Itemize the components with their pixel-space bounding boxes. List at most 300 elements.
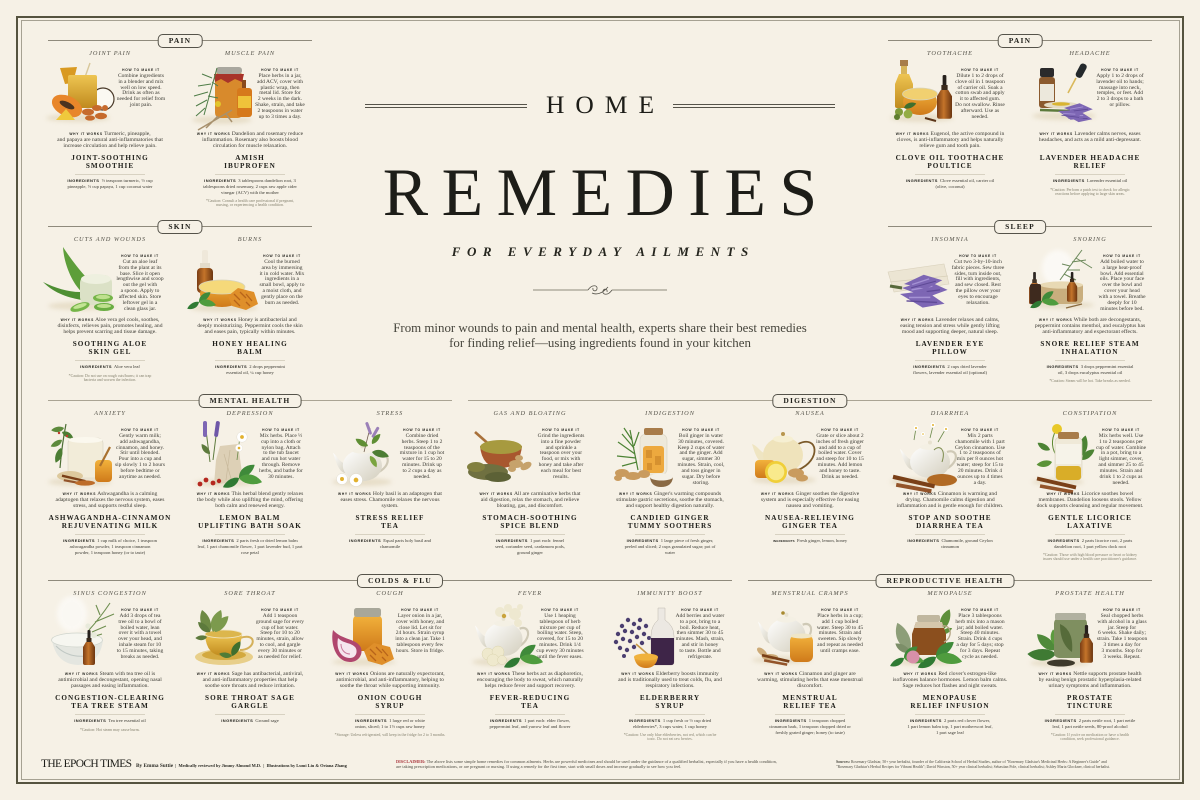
how to make it xyxy=(521,428,601,481)
how to make it: the pillow over your xyxy=(956,288,1000,294)
how to make it: 3 months. Stop for xyxy=(1102,648,1142,654)
how to make it: HOW TO MAKE IT xyxy=(681,608,719,612)
how to make it: 3 times a day for xyxy=(1104,642,1140,648)
ingredients: *Caution: Use only blue elderberries, not red, which can be xyxy=(624,733,716,737)
why it works: WHY IT WORKS While both are decongestants, xyxy=(1039,317,1141,323)
ingredients: peppermint leaf, and yarrow leaf and flower xyxy=(490,724,570,729)
how to make it xyxy=(100,428,180,481)
ingredients: *Caution: Steam will be hot. Take breaks as needed. xyxy=(1049,379,1131,383)
why it works: system. xyxy=(382,503,398,509)
ingredients: tablespoons dried rosemary, 2 cups raw apple cider xyxy=(203,184,297,189)
remedy title xyxy=(1020,340,1160,357)
ingredients xyxy=(215,364,285,375)
how to make it: HOW TO MAKE IT xyxy=(401,608,439,612)
icon: jar, vinegar and rosemary xyxy=(193,67,252,131)
how to make it: oils. Place your face xyxy=(1100,276,1144,282)
remedy title xyxy=(896,154,1004,170)
ingredients: leaf, 1 part nettle seeds, 80-proof alcohol xyxy=(1052,724,1128,729)
how to make it: then simmer 30 to 45 xyxy=(677,630,723,636)
icon: ginger tea with lemon xyxy=(740,420,830,490)
why it works xyxy=(740,672,880,690)
why it works: soothe sore throats and reduce irritation. xyxy=(205,683,295,689)
icon: nettle tincture jar xyxy=(1020,600,1110,670)
how to make it: eyes to encourage xyxy=(958,294,998,300)
how to make it: 20 minutes. Drink 4 xyxy=(958,468,1002,474)
remedy title xyxy=(600,514,740,531)
ingredients xyxy=(203,178,297,207)
icon: aloe vera and gel xyxy=(43,247,115,312)
how to make it xyxy=(116,254,164,312)
ingredients: *Storage: Unless refrigerated, will keep in the fridge for 2 to 3 months. xyxy=(335,733,445,737)
how to make it: HOW TO MAKE IT xyxy=(959,254,997,258)
how to make it: Boil ginger in water xyxy=(679,433,723,439)
how to make it: Strain. Drink 4 cups xyxy=(958,636,1002,642)
how to make it: small bowl, apply to xyxy=(260,282,304,288)
ingredients: INGREDIENTS Ground sage xyxy=(221,718,279,723)
how to make it: inches of fresh ginger xyxy=(816,439,864,445)
how to make it: cup of hot water. xyxy=(262,625,298,631)
intro paragraph: From minor wounds to pain and mental health, experts share their best remedies xyxy=(393,321,807,335)
how to make it: 2 weeks in the dark. xyxy=(258,96,302,102)
why it works xyxy=(460,672,600,690)
how to make it xyxy=(380,608,460,655)
ingredients: INGREDIENTS Tea tree essential oil xyxy=(74,718,146,723)
how to make it: lengthwise and scoop xyxy=(116,276,164,282)
ingredients xyxy=(740,718,880,736)
ingredients: INGREDIENTS 3 drops peppermint essential xyxy=(1047,364,1133,369)
how to make it: water. Steep 30 to 45 xyxy=(817,625,863,631)
card: headache xyxy=(1033,50,1144,196)
how to make it: gently place on the xyxy=(261,294,303,300)
how to make it xyxy=(940,428,1020,486)
how to make it: massage into neck, xyxy=(1099,85,1141,91)
ingredients: INGREDIENTS Clove essential oil, carrier oil xyxy=(906,178,994,183)
ingredients: rose petal xyxy=(241,550,259,555)
why it works: relieve gum and tooth pain. xyxy=(919,143,981,149)
remedy title xyxy=(880,514,1020,531)
how to make it: 30 minutes. xyxy=(268,474,294,480)
disclaimer xyxy=(396,760,777,769)
heading: digestion xyxy=(772,394,848,408)
ingredients: reactions before applying to large skin areas. xyxy=(1055,192,1125,196)
how to make it: minutes. Strain and xyxy=(1100,468,1142,474)
why it works: nausea and vomiting. xyxy=(786,503,834,509)
how to make it: cinnamon, and honey. xyxy=(116,445,164,451)
how to make it: and stir in honey xyxy=(682,642,718,648)
how to make it: storing. xyxy=(693,480,709,486)
ingredients: *Caution: Perform a patch test to check for allergic xyxy=(1050,188,1130,192)
how to make it xyxy=(240,608,320,661)
remedy title xyxy=(1020,154,1160,171)
why it works: inflammation. Rosemary also boosts blood xyxy=(202,137,298,143)
remedy title: TEA xyxy=(381,522,399,530)
ailment heading: PROSTATE HEALTH xyxy=(1055,590,1125,597)
why it works: dock supports cleansing and regular movement. xyxy=(1037,503,1143,509)
how to make it: and honey to taste. xyxy=(819,468,861,474)
ailment heading: GAS AND BLOATING xyxy=(493,410,567,417)
how to make it: Place 3 tablespoons xyxy=(958,613,1002,619)
how to make it xyxy=(955,68,1005,120)
how to make it: Cut an aloe leaf xyxy=(123,259,157,265)
ingredients: essential oil, ¼ cup honey xyxy=(226,370,274,375)
remedy title xyxy=(320,694,460,711)
heading: pain: PAIN xyxy=(169,36,191,45)
why it works: by easing benign prostatic hyperplasia-related xyxy=(1039,677,1141,683)
why it works: helps reduce fever and support recovery. xyxy=(485,683,575,689)
ingredients: INGREDIENTS 1 part each: elder flower, xyxy=(490,718,570,723)
card: cough xyxy=(320,586,460,751)
ailment heading: FEVER xyxy=(518,590,542,597)
remedy title: CLOVE OIL TOOTHACHE xyxy=(896,154,1004,162)
how to make it: Steep 40 minutes. xyxy=(960,630,1000,636)
how to make it: base. Slice it open xyxy=(120,271,160,277)
remedy title: INHALATION xyxy=(1061,348,1119,356)
ailment heading: CUTS AND WOUNDS xyxy=(74,236,146,243)
ingredients: elderberries*, 3 cups water, 1 cup honey xyxy=(633,724,707,729)
how to make it: ingredients in a xyxy=(265,276,299,282)
ingredients: INGREDIENTS 1 large piece of fresh ginger, xyxy=(627,538,713,543)
how to make it: Combine dried xyxy=(406,433,438,439)
how to make it: until the fever eases. xyxy=(537,654,583,660)
icon: elderberries and syrup bottle xyxy=(600,600,690,670)
why it works: and support healthy digestion naturally. xyxy=(626,503,714,509)
how to make it: HOW TO MAKE IT xyxy=(1103,608,1141,612)
how to make it: food, or mix with xyxy=(542,456,580,462)
remedy title: PROSTATE xyxy=(1067,694,1113,702)
how to make it: Layer onion in a jar, xyxy=(398,613,442,619)
ailment heading: TOOTHACHE xyxy=(927,50,973,57)
how to make it: minutes. Add lemon xyxy=(818,462,862,468)
why it works xyxy=(180,492,320,510)
how to make it: 1 to 2 teaspoons per xyxy=(1099,439,1143,445)
why it works: and anti-inflammatory properties that help xyxy=(203,677,297,683)
ingredients: peeled and sliced; 2 cups granulated sugar; pot of xyxy=(625,544,715,549)
why it works: increase circulation and help relieve pain. xyxy=(63,143,157,149)
how to make it: HOW TO MAKE IT xyxy=(1101,68,1139,72)
remedy title: STOMACH-SOOTHING xyxy=(482,514,578,522)
ingredients: INGREDIENTS 2 drops peppermint xyxy=(215,364,285,369)
how to make it: sugar, simmer 30 xyxy=(682,456,720,462)
why it works: circulation for muscle relaxation. xyxy=(213,143,287,149)
ingredients: water xyxy=(665,550,675,555)
how to make it: Apply 1 to 2 drops of xyxy=(1096,73,1144,79)
how to make it: a day. xyxy=(974,480,986,486)
how to make it: Mix herbs well. Use xyxy=(1099,433,1143,439)
heading: reproductive health: REPRODUCTIVE HEALTH xyxy=(887,576,1003,585)
how to make it: anytime as needed. xyxy=(119,474,161,480)
title block xyxy=(365,90,835,350)
how to make it: Cut two 3-by-10-inch xyxy=(954,259,1002,265)
why it works xyxy=(600,672,740,690)
how to make it: and add to a cup of xyxy=(819,445,861,451)
card: prostate health xyxy=(1020,586,1160,751)
how to make it: minutes. Mash, strain, xyxy=(676,636,724,642)
how to make it xyxy=(661,428,741,486)
how to make it: until cramps ease. xyxy=(820,648,860,654)
how to make it: cup of water. Combine xyxy=(1096,445,1146,451)
how to make it xyxy=(260,254,304,306)
how to make it: boil. Reduce heat, xyxy=(680,625,720,631)
how to make it: Cool the burned xyxy=(264,259,300,265)
how to make it: to cool, and gargle xyxy=(260,642,300,648)
why it works xyxy=(460,492,600,510)
ornament xyxy=(533,285,667,295)
heading: mental health: MENTAL HEALTH xyxy=(210,396,290,405)
panel: colds and flu xyxy=(40,574,740,754)
how to make it: nylon bag. Attach xyxy=(262,445,300,451)
how to make it: cup into a cloth or xyxy=(261,439,301,445)
how to make it: deeply for 10 xyxy=(1107,300,1137,306)
ingredients: leaf, 1 part chamomile flower, 1 part lavender bud, 1 part xyxy=(197,544,303,549)
remedy title: RELIEF TEA xyxy=(783,702,837,710)
how to make it: HOW TO MAKE IT xyxy=(121,428,159,432)
how to make it: mixture per cup of xyxy=(540,625,580,631)
remedy title: SYRUP xyxy=(655,702,685,710)
how to make it: it in cold water. Mix xyxy=(260,271,304,277)
how to make it: 2 teaspoons in water xyxy=(257,108,303,114)
how to make it xyxy=(938,254,1018,307)
why it works: WHY IT WORKS Onions are naturally expectorant, xyxy=(335,671,445,677)
why it works: inflammation and is gentle enough for children. xyxy=(897,503,1003,509)
why it works: WHY IT WORKS Steam with tea tree oil is xyxy=(65,671,155,677)
card: constipation xyxy=(1020,406,1160,571)
how to make it: up to 3 times a day. xyxy=(259,114,301,120)
why it works xyxy=(196,131,303,149)
how to make it: well on low speed. xyxy=(120,85,162,91)
how to make it: a spoon. Apply to xyxy=(121,288,159,294)
ailment heading: SORE THROAT xyxy=(224,590,276,597)
why it works: mood and supporting deeper, natural sleep. xyxy=(902,329,998,335)
remedy title xyxy=(740,514,880,531)
how to make it: Grate or slice about 2 xyxy=(816,433,864,439)
ingredients: chamomile xyxy=(380,544,400,549)
ingredients: ashwagandha powder, 1 teaspoon cinnamon xyxy=(70,544,150,549)
remedy title: SOOTHING ALOE xyxy=(73,340,147,348)
why it works: drying. Chamomile calms digestion and xyxy=(905,497,995,503)
icon: honey, oil and mint xyxy=(187,250,258,314)
ingredients: seed, coriander seed, cardamom pods, xyxy=(495,544,565,549)
heading: pain xyxy=(998,34,1042,48)
how to make it: and the ginger. Add xyxy=(679,450,723,456)
ingredients: INGREDIENTS ½ teaspoon turmeric, ½ cup xyxy=(67,178,153,183)
how to make it: needed. xyxy=(972,114,988,120)
how to make it: area by immersing xyxy=(262,265,302,271)
how to make it: minutes, strain, allow xyxy=(256,636,304,642)
ingredients xyxy=(40,538,180,556)
icon: teapot, honey and roots xyxy=(740,600,830,670)
ingredients: bacteria and worsen the infection. xyxy=(84,378,136,382)
how to make it: burn as needed. xyxy=(265,300,299,306)
how to make it: and steep for 10 to 15 xyxy=(816,456,864,462)
remedy title: SNORE RELIEF STEAM xyxy=(1040,340,1140,348)
remedy title: IBUPROFEN xyxy=(224,162,276,170)
card: fever xyxy=(460,586,600,751)
icon: licorice and dandelion jar xyxy=(1020,420,1110,490)
ingredients: pineapple, ½ cup papaya, 1 cup coconut water xyxy=(68,184,152,189)
remedy title: BALM xyxy=(237,348,263,356)
how to make it: herbs, and bathe for xyxy=(259,468,303,474)
how to make it: HOW TO MAKE IT xyxy=(541,608,579,612)
how to make it: for 3 days. Repeat xyxy=(960,648,1000,654)
panel: reproductive health xyxy=(740,574,1160,754)
how to make it: every 30 minutes or xyxy=(258,648,302,654)
ingredients xyxy=(1020,178,1160,196)
ailment heading: ANXIETY xyxy=(94,410,126,417)
remedy title: REJUVENATING MILK xyxy=(62,522,158,530)
ingredients xyxy=(67,178,153,189)
why it works: WHY IT WORKS All are carminative herbs that xyxy=(479,491,580,497)
how to make it: mix per 8 ounces hot xyxy=(957,456,1003,462)
remedy title xyxy=(180,694,320,711)
how to make it: Keep 2 cups of water xyxy=(678,445,724,451)
how to make it: Place herbs in a jar, xyxy=(258,73,302,79)
why it works: cloves, is anti-inflammatory and helps naturally xyxy=(897,137,1003,143)
how to make it: tree oil to a bowl of xyxy=(118,619,162,625)
how to make it: tablespoon of herb xyxy=(540,619,580,625)
remedy title: STOP AND SOOTHE xyxy=(908,514,992,522)
how to make it xyxy=(116,68,165,108)
how to make it: HOW TO MAKE IT xyxy=(263,254,301,258)
how to make it: hours. Store in fridge. xyxy=(396,648,444,654)
why it works xyxy=(600,492,740,510)
how to make it: Add berries and water xyxy=(676,613,724,619)
remedy title: TEA xyxy=(521,702,539,710)
how to make it: 2 to 3 drops to a bath xyxy=(1097,96,1143,102)
remedy title xyxy=(460,514,600,531)
remedy title: GENTLE LICORICE xyxy=(1048,514,1132,522)
how to make it: teaspoons of the xyxy=(404,445,440,451)
how to make it: minutes before bed. xyxy=(1100,306,1144,312)
ingredients xyxy=(600,718,740,741)
ingredients: powder, 1 teaspoon honey (or to taste) xyxy=(75,550,145,555)
how to make it: HOW TO MAKE IT xyxy=(1103,254,1141,258)
card: muscle pain xyxy=(193,50,305,207)
icon: steam bowl and tea tree oil xyxy=(40,600,130,670)
how to make it: in a blender and mix xyxy=(118,79,164,85)
card: insomnia xyxy=(880,232,1020,397)
remedy title: SMOOTHIE xyxy=(86,162,134,170)
ingredients: nursing, or experiencing a health condition. xyxy=(216,203,284,207)
remedy title: UPLIFTING BATH SOAK xyxy=(198,522,302,530)
ingredients: 1 part sage leaf xyxy=(936,730,964,735)
heading: colds and flu xyxy=(357,574,443,588)
why it works: isoflavones balance hormones. Lemon balm calms. xyxy=(893,677,1007,683)
remedy title: RELIEF INFUSION xyxy=(910,702,990,710)
heading: colds and flu: COLDS & FLU xyxy=(368,576,432,585)
ingredients: INGREDIENTS Aloe vera leaf xyxy=(80,364,140,369)
how to make it: over it with a towel xyxy=(119,630,161,636)
heading: reproductive health xyxy=(876,574,1014,588)
how to make it: Grind the ingredients xyxy=(538,433,584,439)
how to make it: herb mix into a mason xyxy=(955,619,1005,625)
why it works: encouraging the body to sweat, which naturally xyxy=(477,677,583,683)
how to make it: over the bowl and xyxy=(1102,282,1142,288)
how to make it: Gently warm milk; xyxy=(119,433,161,439)
why it works: stress, and supports restful sleep. xyxy=(73,503,147,509)
how to make it: close lid. Let sit for xyxy=(399,625,441,631)
how to make it: water for 15 to 20 xyxy=(402,456,442,462)
why it works xyxy=(40,492,180,510)
how to make it: before bedtime or xyxy=(120,468,160,474)
ailment heading: DIARRHEA xyxy=(931,410,969,417)
disclaimer: DISCLAIMER: The above lists some simple home remedies for common ailments. Herbs are powerful medicines and should be used under the guidance of a qualified herbalist, especially if you have a health condition, xyxy=(396,759,777,764)
how to make it: HOW TO MAKE IT xyxy=(682,428,720,432)
heading: sleep: SLEEP xyxy=(1005,222,1035,231)
how to make it: strain. Take 1 teaspoon xyxy=(1097,636,1147,642)
how to make it: Do not swallow. Rinse xyxy=(955,102,1005,108)
how to make it: through. Remove xyxy=(262,462,300,468)
ingredients xyxy=(600,538,740,556)
card: nausea xyxy=(740,406,880,571)
how to make it: out the gel with xyxy=(123,282,157,288)
how to make it: HOW TO MAKE IT xyxy=(122,68,160,72)
ingredients: INGREDIENTS 3 tablespoons dandelion root, 3 xyxy=(204,178,296,183)
remedy title: STRESS RELIEF xyxy=(356,514,424,522)
how to make it: 1 to 2 teaspoons of xyxy=(959,450,1001,456)
ingredients: INGREDIENTS Equal parts holy basil and xyxy=(349,538,431,543)
icon: lavender eye pillow xyxy=(880,246,970,316)
how to make it: HOW TO MAKE IT xyxy=(961,68,999,72)
how to make it: jar; add boiled water. xyxy=(957,625,1003,631)
remedy title: GARGLE xyxy=(231,702,269,710)
heading: skin xyxy=(157,220,203,234)
why it works: the body while also uplifting the mind, offering xyxy=(197,497,303,503)
ingredients xyxy=(320,538,460,550)
why it works: WHY IT WORKS Licorice soothes bowel xyxy=(1047,491,1133,497)
remedy title xyxy=(320,514,460,531)
how to make it: Seal chopped herbs xyxy=(1101,613,1143,619)
how to make it: Mix 2 parts xyxy=(967,433,993,439)
why it works: easing tension and stress while gently lifting xyxy=(900,323,1000,329)
ingredients: *Caution: If you're on medication or have a health xyxy=(1051,733,1129,737)
icon: sage tea xyxy=(180,600,270,670)
card: indigestion xyxy=(600,406,740,571)
ingredients xyxy=(1020,364,1160,383)
logo: The Epoch Times: THE EPOCH TIMES xyxy=(41,758,131,770)
how to make it: plastic wrap, then xyxy=(261,85,299,91)
why it works xyxy=(880,672,1020,690)
why it works: urinary symptoms and inflammation. xyxy=(1049,683,1131,689)
ailment heading: JOINT PAIN xyxy=(89,50,131,57)
heading: digestion: DIGESTION xyxy=(783,396,837,405)
ingredients xyxy=(880,364,1020,376)
how to make it: HOW TO MAKE IT xyxy=(961,428,999,432)
remedy title: RELIEF xyxy=(1073,162,1107,170)
icon: spice bowl xyxy=(460,420,550,490)
how to make it: 6 weeks. Shake daily; xyxy=(1098,630,1146,636)
card: stress xyxy=(320,406,460,571)
how to make it: add ashwagandha, xyxy=(120,439,160,445)
ingredients: 1 part lemon balm top, 1 part motherwort leaf, xyxy=(907,724,993,729)
how to make it: a day for 5 days; stop xyxy=(956,642,1004,648)
ailment heading: MENSTRUAL CRAMPS xyxy=(771,590,849,597)
how to make it: minutes. Drink up xyxy=(402,462,442,468)
how to make it: in a pot, bring to a xyxy=(1101,450,1141,456)
why it works: eases stress. Chamomile relaxes the nervous xyxy=(340,497,440,503)
why it works xyxy=(57,317,162,335)
how to make it: HOW TO MAKE IT xyxy=(262,428,300,432)
ingredients: vinegar (ACV) with the mother xyxy=(221,190,279,195)
how to make it xyxy=(800,428,880,481)
how to make it: a large heat-proof xyxy=(1102,265,1142,271)
footer xyxy=(40,756,1160,776)
how to make it xyxy=(940,608,1020,661)
remedy title: CANDIED GINGER xyxy=(630,514,710,522)
how to make it: fabric pieces. Sew three xyxy=(952,265,1004,271)
why it works xyxy=(320,672,460,690)
ingredients: INGREDIENTS 1 part each: fennel xyxy=(496,538,564,543)
why it works: WHY IT WORKS Lavender relaxes and calms, xyxy=(901,317,999,323)
